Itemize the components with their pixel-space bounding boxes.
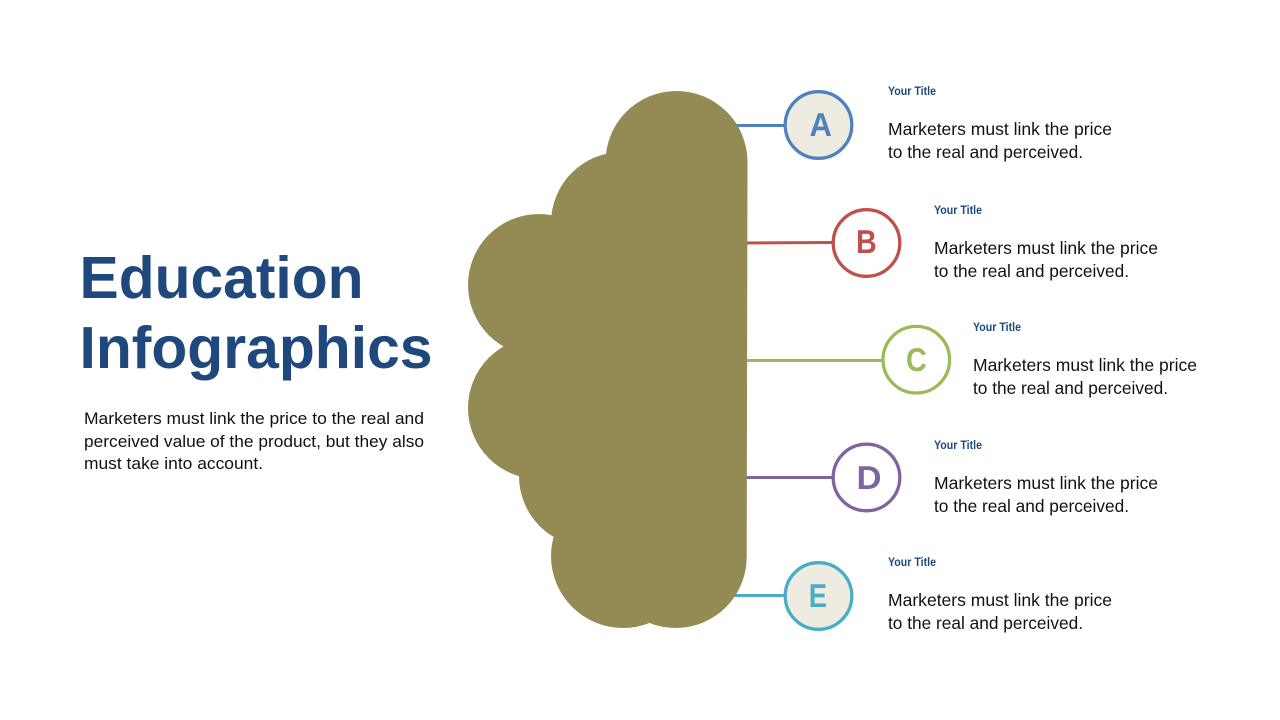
text block B: Marketers must link the price xyxy=(934,238,1158,258)
node B xyxy=(833,210,900,276)
text block C: to the real and perceived. xyxy=(973,378,1168,398)
text block E xyxy=(888,557,1112,633)
text block A xyxy=(888,86,1112,162)
text block E: Marketers must link the price xyxy=(888,590,1112,610)
node C: C xyxy=(906,341,927,378)
text block B xyxy=(934,205,1158,281)
text block D: to the real and perceived. xyxy=(934,496,1129,516)
text block C xyxy=(973,322,1197,398)
text block B: to the real and perceived. xyxy=(934,261,1129,281)
text block C: Marketers must link the price xyxy=(973,355,1197,375)
intro text block xyxy=(84,409,424,473)
text block E: to the real and perceived. xyxy=(888,613,1083,633)
intro text block: Marketers must link the price to the real and xyxy=(84,409,424,428)
text block D xyxy=(934,440,1158,516)
node E xyxy=(785,563,852,629)
text block A: Your Title xyxy=(888,86,936,98)
text block D: Your Title xyxy=(934,440,982,452)
node C xyxy=(883,326,950,393)
text block E: Your Title xyxy=(888,557,936,569)
title: Infographics xyxy=(80,315,432,381)
text block C: Your Title xyxy=(973,322,1021,334)
title: Education xyxy=(80,245,364,311)
connector lines xyxy=(730,126,884,596)
node B: B xyxy=(856,223,877,260)
text block D: Marketers must link the price xyxy=(934,473,1158,493)
node D: D xyxy=(856,459,882,496)
text block A: to the real and perceived. xyxy=(888,142,1083,162)
title xyxy=(80,245,432,381)
node D xyxy=(833,444,900,511)
intro text block: perceived value of the product, but they also xyxy=(84,432,424,451)
brain cloud shape xyxy=(468,91,748,628)
intro text block: must take into account. xyxy=(84,454,263,473)
node E: E xyxy=(809,577,827,614)
text block B: Your Title xyxy=(934,205,982,217)
node A xyxy=(785,92,852,158)
text block A: Marketers must link the price xyxy=(888,119,1112,139)
node A: A xyxy=(810,106,832,143)
